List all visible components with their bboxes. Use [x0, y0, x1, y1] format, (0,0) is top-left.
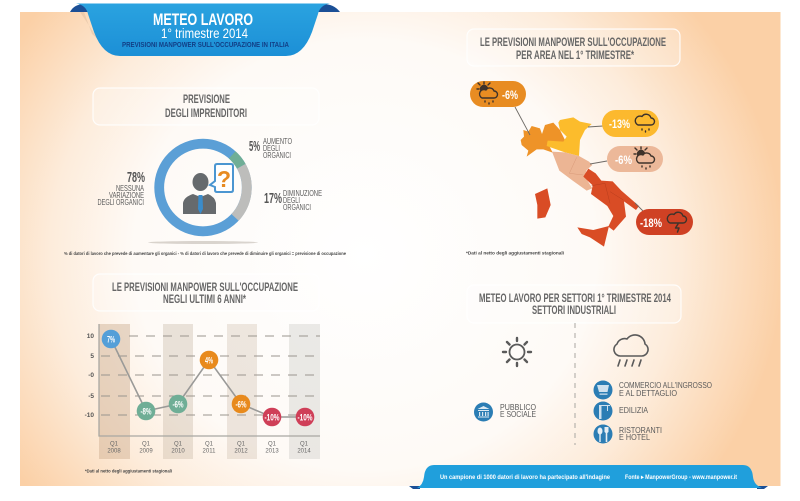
- data points: -6%: [172, 400, 184, 410]
- label: 17% diminuzione: DEGLI: [283, 196, 300, 205]
- panel: per area heading: [467, 29, 680, 66]
- callout: centre -6%: [607, 146, 663, 172]
- region: sicily: [577, 226, 609, 247]
- sector: ristoranti e hotel: [594, 424, 662, 444]
- icon: sun cloud drops: [477, 82, 498, 104]
- callout: north west -6%: -6%: [502, 88, 518, 102]
- region: south: [583, 169, 639, 231]
- header subtitle: 1° trimestre 2014: [161, 25, 248, 41]
- panel: previsione degli imprenditori heading: PREVISIONE: [183, 94, 230, 106]
- sector: commercio: E AL DETTAGLIO: [619, 389, 677, 398]
- x axis labels: 2009: [139, 448, 153, 454]
- leader lines: [515, 107, 643, 211]
- icon: cloud lightning: [667, 212, 687, 232]
- label: 5% aumento: AUMENTO: [263, 137, 292, 146]
- line chart: [85, 324, 320, 459]
- region: sardinia: [535, 188, 551, 219]
- footnote: donut: % di datori di lavoro che prevede di aumentare gli organici - % di datori di lavoro che prevede di diminuire gli organici = previsione di occupazione: [64, 251, 346, 256]
- panel: settori heading: METEO LAVORO PER SETTORI 1° TRIMESTRE 2014: [479, 293, 671, 305]
- footer sample text: Un campione di 1000 datori di lavoro ha partecipato all'indagine: [440, 474, 610, 481]
- footnote: map: *Dati al netto degli aggiustamenti stagionali: [466, 250, 564, 256]
- line chart: 5: [90, 353, 94, 360]
- region: north west: [521, 123, 566, 157]
- panel: ultimi 6 anni heading: LE PREVISIONI MANPOWER SULL'OCCUPAZIONE: [112, 282, 298, 294]
- x axis labels: 2008: [107, 448, 121, 454]
- region: centre: [552, 152, 592, 191]
- label: 17% diminuzione: DIMINUZIONE: [283, 189, 322, 198]
- sector: edilizia: [594, 402, 649, 420]
- panel: previsione degli imprenditori heading: [93, 88, 319, 125]
- header tagline: PREVISIONI MANPOWER SULL'OCCUPAZIONE IN ITALIA: [122, 40, 289, 49]
- label: 5% aumento: DEGLI: [263, 144, 280, 153]
- region: north east: [547, 117, 592, 156]
- data points: [102, 330, 314, 426]
- callout: south -18%: [636, 209, 693, 235]
- line chart: 10: [87, 333, 94, 340]
- sector: commercio: COMMERCIO ALL'INGROSSO: [619, 381, 712, 390]
- label: 5% aumento: ORGANICI: [263, 151, 291, 160]
- panel: per area heading: PER AREA NEL 1° TRIMESTRE*: [516, 50, 634, 62]
- map of Italy: [521, 117, 639, 247]
- line chart: -10: [85, 412, 94, 419]
- sector: ristoranti e hotel: E HOTEL: [619, 433, 650, 442]
- panel: ultimi 6 anni heading: NEGLI ULTIMI 6 ANNI*: [163, 294, 246, 306]
- x axis labels: 2014: [297, 448, 311, 454]
- sector: pubblico e sociale: PUBBLICO: [500, 403, 536, 412]
- label: 5% aumento: [249, 137, 292, 160]
- sector: pubblico e sociale: [474, 402, 536, 422]
- footnote: line chart: *Dati al netto degli aggiustamenti stagionali: [85, 468, 172, 474]
- panel: settori heading: [467, 285, 681, 323]
- x axis labels: 2012: [234, 448, 248, 454]
- label: 17% diminuzione: [264, 189, 322, 212]
- panel: per area heading: LE PREVISIONI MANPOWER SULL'OCCUPAZIONE: [480, 37, 666, 49]
- sector: edilizia: EDILIZIA: [619, 406, 649, 415]
- label: 5% aumento: 5%: [249, 138, 260, 155]
- data points: -10%: [264, 412, 280, 424]
- data points: -6%: [236, 400, 247, 410]
- callout: north east -13%: [602, 110, 659, 137]
- label: 17% diminuzione: 17%: [264, 190, 282, 207]
- icon: businessman: [183, 173, 216, 214]
- x axis labels: Q1: [174, 442, 183, 448]
- sector: commercio: [594, 380, 712, 400]
- callout: north west -6%: [470, 81, 526, 107]
- icon: sun cloud drops: [634, 147, 655, 169]
- header ribbon: [70, 4, 340, 56]
- line chart: -5: [88, 393, 94, 400]
- icon: cloud drops: [635, 114, 655, 132]
- callout: north east -13%: -13%: [609, 117, 630, 131]
- x axis labels: Q1: [205, 442, 214, 448]
- icon: sun: [503, 338, 531, 366]
- line chart: -0: [88, 372, 94, 379]
- x axis labels: 2013: [265, 448, 279, 454]
- sector: pubblico e sociale: E SOCIALE: [500, 410, 536, 419]
- x axis labels: 2010: [171, 448, 185, 454]
- panel: settori heading: SETTORI INDUSTRIALI: [532, 305, 616, 317]
- data points: -10%: [298, 412, 313, 424]
- label: 78% nessuna variazione: [98, 169, 145, 207]
- x axis labels: Q1: [142, 442, 151, 448]
- panel: ultimi 6 anni heading: [93, 274, 319, 311]
- label: 78% nessuna variazione: 78%: [127, 169, 145, 186]
- icon: rain cloud: [614, 335, 648, 366]
- data points: -8%: [140, 406, 152, 418]
- label: 78% nessuna variazione: NESSUNA: [116, 184, 144, 193]
- x axis labels: Q1: [268, 442, 277, 448]
- label: 78% nessuna variazione: VARIAZIONE: [109, 191, 144, 200]
- sector: ristoranti e hotel: RISTORANTI: [619, 426, 662, 435]
- header title: METEO LAVORO: [153, 10, 253, 29]
- x axis labels: Q1: [237, 442, 246, 448]
- callout: south -18%: -18%: [640, 216, 662, 230]
- x axis labels: Q1: [110, 442, 119, 448]
- x axis labels: Q1: [300, 442, 309, 448]
- label: 17% diminuzione: ORGANICI: [283, 203, 311, 212]
- icon: speech bubble question: ?: [217, 166, 231, 192]
- panel: previsione degli imprenditori heading: DEGLI IMPRENDITORI: [165, 108, 247, 120]
- data points: 7%: [107, 334, 115, 346]
- callout: centre -6%: -6%: [615, 153, 632, 167]
- label: 78% nessuna variazione: DEGLI ORGANICI: [98, 198, 144, 207]
- footer ribbon: [409, 465, 768, 489]
- data points: 4%: [205, 356, 213, 366]
- donut chart: [148, 144, 258, 244]
- footer source text: Fonte ▸ ManpowerGroup - www.manpower.it: [625, 474, 738, 481]
- x axis labels: 2011: [203, 448, 216, 454]
- x axis labels: [107, 442, 311, 454]
